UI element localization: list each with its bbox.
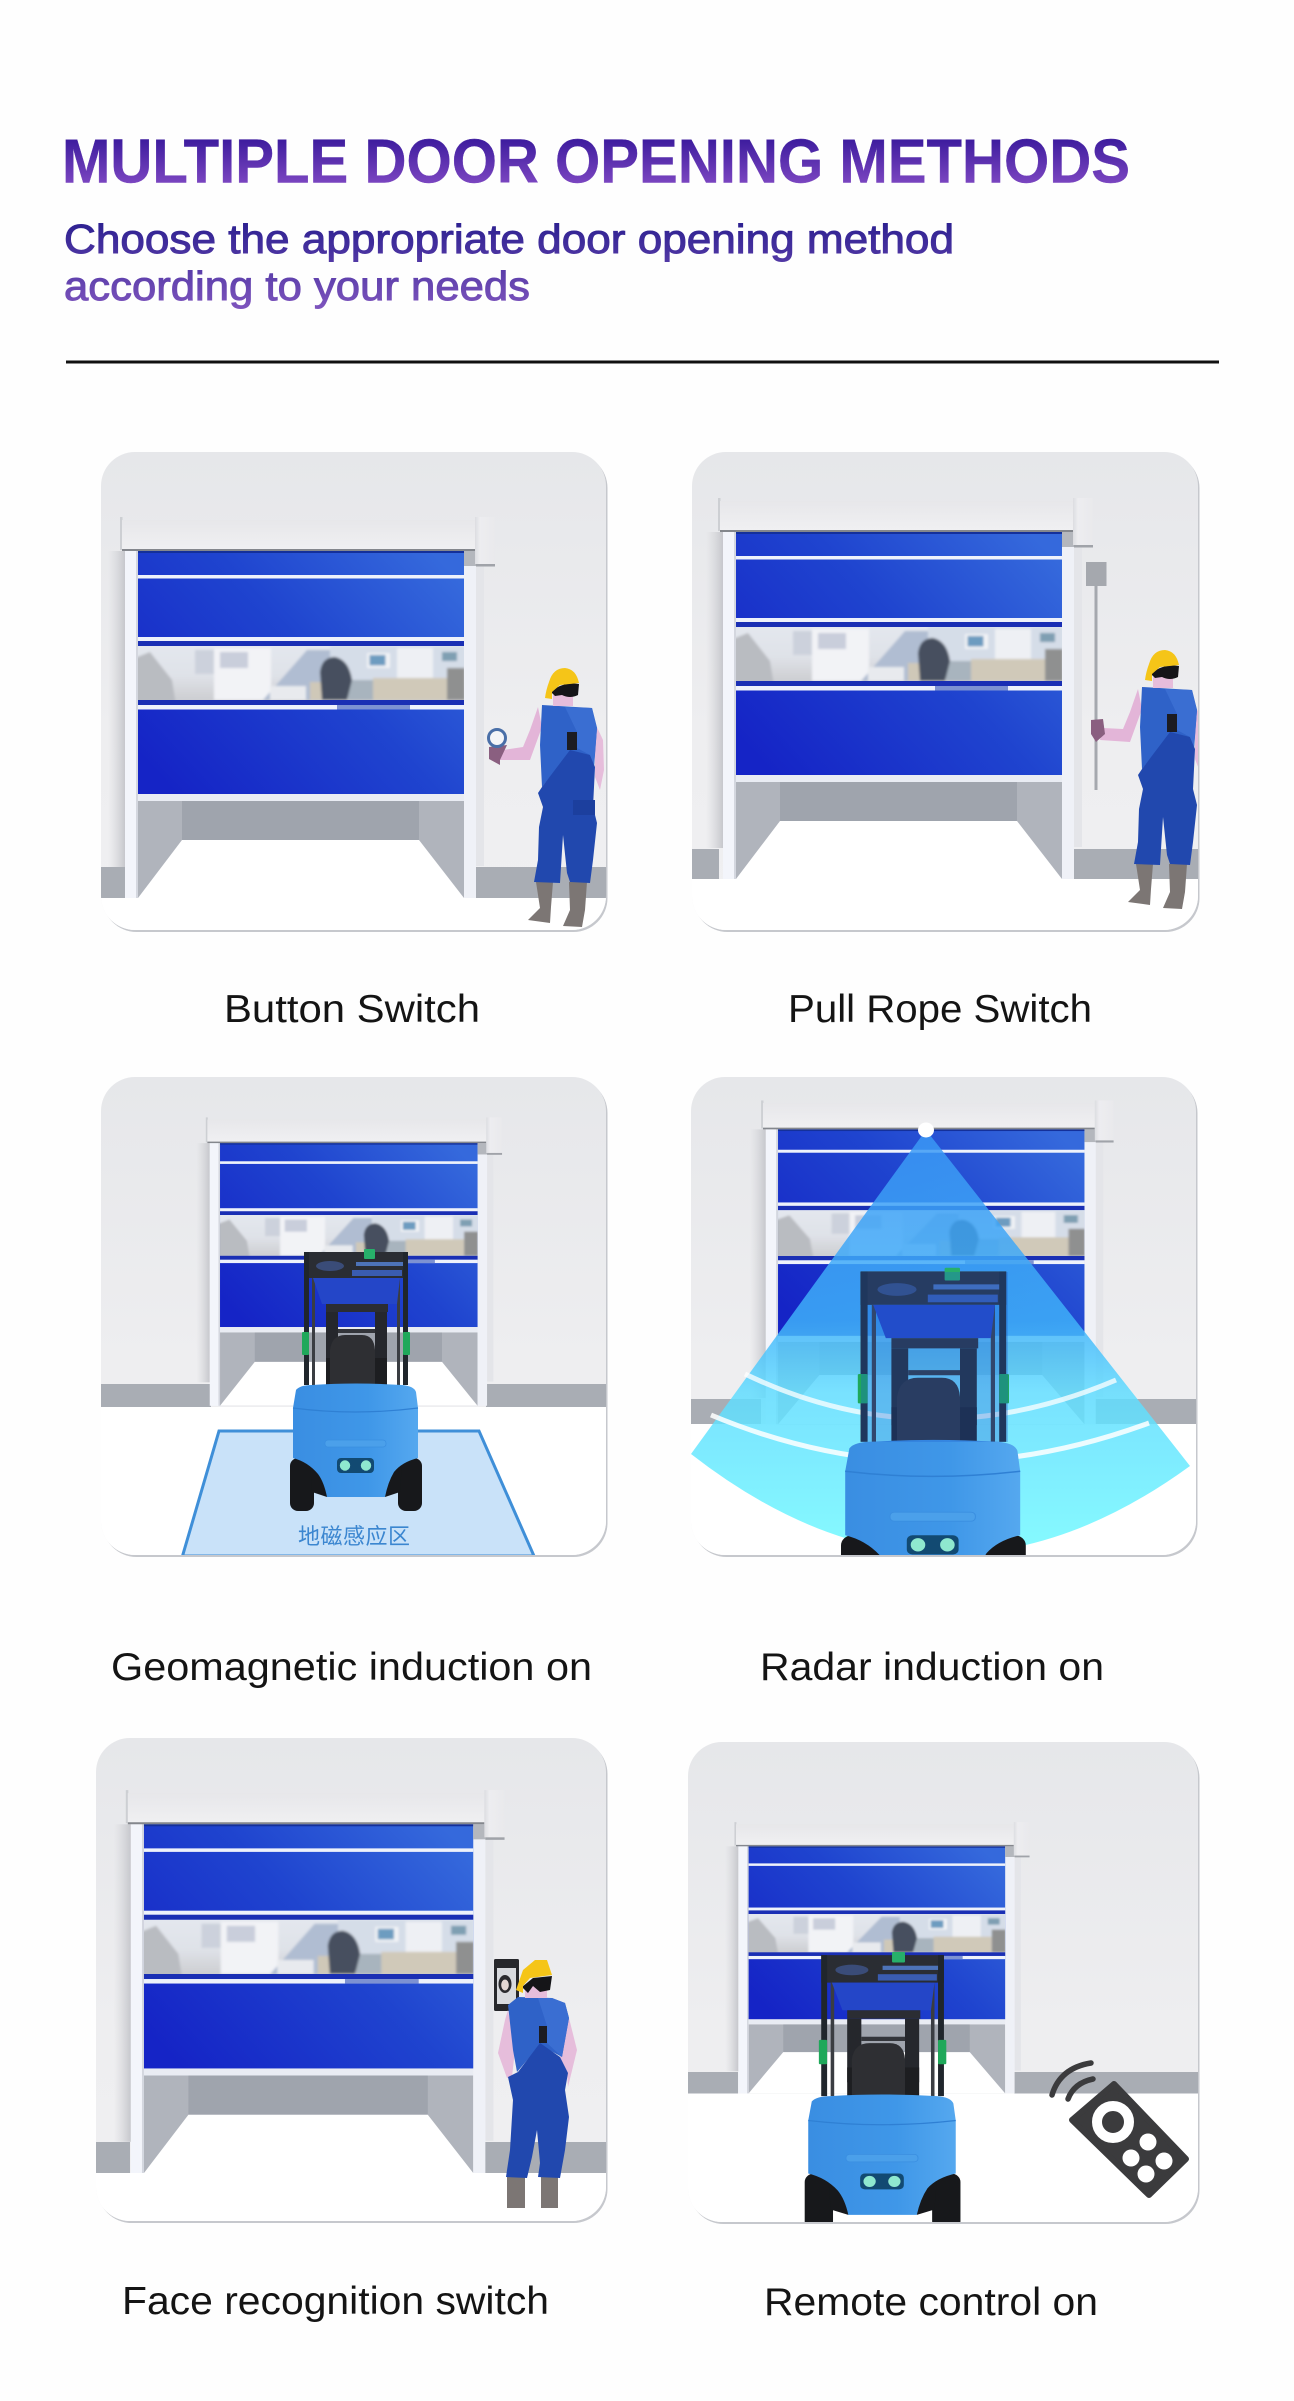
door (750, 1100, 1114, 1424)
header (62, 128, 1219, 364)
label: Geomagnetic induction on: Geomagnetic induction on (111, 1646, 592, 1689)
door (108, 517, 495, 898)
label: Remote control on: Remote control on (764, 2281, 1098, 2324)
pull rope (1086, 562, 1106, 790)
label: Button Switch: Button Switch (224, 988, 480, 1031)
panel: remote control (688, 1742, 1200, 2230)
radar sensor (918, 1122, 934, 1138)
door (196, 1117, 502, 1406)
worker pulling rope (1091, 650, 1204, 909)
geomagnetic zone: 地磁感应区 (298, 1524, 410, 1549)
geomagnetic zone (182, 1431, 534, 1556)
panel: radar induction (691, 1077, 1198, 1603)
face recognition terminal (494, 1959, 519, 2011)
panel: geomagnetic induction (101, 1077, 608, 1557)
panel: pull rope switch (692, 452, 1204, 932)
radar cone (691, 1130, 1190, 1554)
subtitle line 2: according to your needs (64, 263, 530, 309)
forklift (841, 1268, 1026, 1555)
worker pressing button (488, 668, 604, 927)
door (706, 498, 1093, 879)
door (114, 1790, 505, 2173)
label: Pull Rope Switch: Pull Rope Switch (788, 988, 1092, 1031)
forklift (805, 1952, 960, 2230)
panel: face recognition switch (96, 1738, 608, 2223)
door (725, 1822, 1030, 2093)
label: Radar induction on: Radar induction on (760, 1646, 1104, 1689)
forklift (290, 1249, 422, 1511)
title: MULTIPLE DOOR OPENING METHODS (62, 128, 1130, 196)
panel: button switch (101, 452, 608, 932)
worker facing terminal (498, 1960, 577, 2208)
icon: remote control (1052, 2063, 1186, 2195)
label: Face recognition switch: Face recognition switch (122, 2280, 549, 2323)
subtitle line 1: Choose the appropriate door opening method (64, 216, 954, 262)
